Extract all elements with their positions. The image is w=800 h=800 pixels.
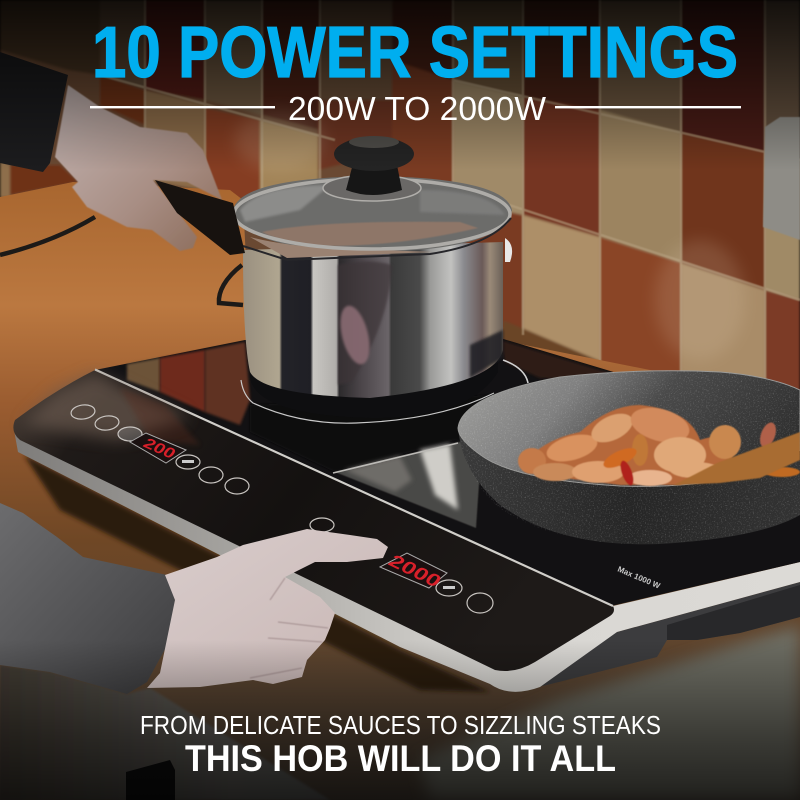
wall grout lines	[100, 0, 800, 390]
control buttons: left burner	[70, 403, 249, 494]
hob silver rim	[14, 430, 800, 692]
bottom caption: FROM DELICATE SAUCES TO SIZZLING STEAKS	[140, 710, 661, 740]
frying pan	[458, 371, 800, 544]
hob base	[520, 582, 800, 690]
cooking zone ring	[241, 380, 494, 423]
power display: 2000	[380, 551, 447, 591]
glass lid	[233, 176, 512, 252]
foreground grey surface	[0, 665, 330, 800]
pot handle	[155, 180, 245, 255]
pot contents	[262, 222, 478, 246]
pan interior	[458, 371, 800, 486]
top and bottom shading	[0, 0, 800, 170]
pan outer	[458, 400, 800, 544]
lower right worn worktop	[420, 625, 800, 800]
rating text on glass: Max 1000 W	[616, 565, 662, 591]
pot	[233, 136, 512, 418]
power display: 200: 200	[140, 435, 179, 462]
hand and finger	[147, 529, 388, 688]
hob glass: cooking zones	[95, 338, 800, 606]
black clip on surface	[126, 760, 175, 800]
wooden spatula	[674, 432, 800, 485]
bottom headline: THIS HOB WILL DO IT ALL	[185, 738, 616, 779]
control buttons: right burner	[310, 518, 493, 613]
pan speckle	[458, 371, 800, 544]
power display: 2000: 2000	[385, 551, 445, 591]
background: tiled wall	[0, 0, 800, 420]
worktop: wood	[0, 182, 800, 800]
subtitle with rules: 200W TO 2000W	[288, 90, 547, 127]
shrimp	[518, 402, 800, 487]
hob shadow	[24, 455, 490, 692]
control panel	[13, 370, 614, 671]
left hand holding pot	[0, 52, 245, 255]
pressing hand	[0, 503, 388, 694]
pot side handle	[505, 238, 512, 262]
wall socket	[763, 117, 800, 240]
lid knob	[346, 160, 402, 195]
steam	[235, 110, 745, 360]
power display: 200	[130, 433, 186, 463]
power cable	[0, 217, 243, 305]
hand	[55, 85, 222, 251]
upper sleeve	[0, 52, 68, 172]
lower sleeve	[0, 503, 175, 694]
pot base	[250, 355, 498, 418]
pot body	[243, 242, 503, 398]
